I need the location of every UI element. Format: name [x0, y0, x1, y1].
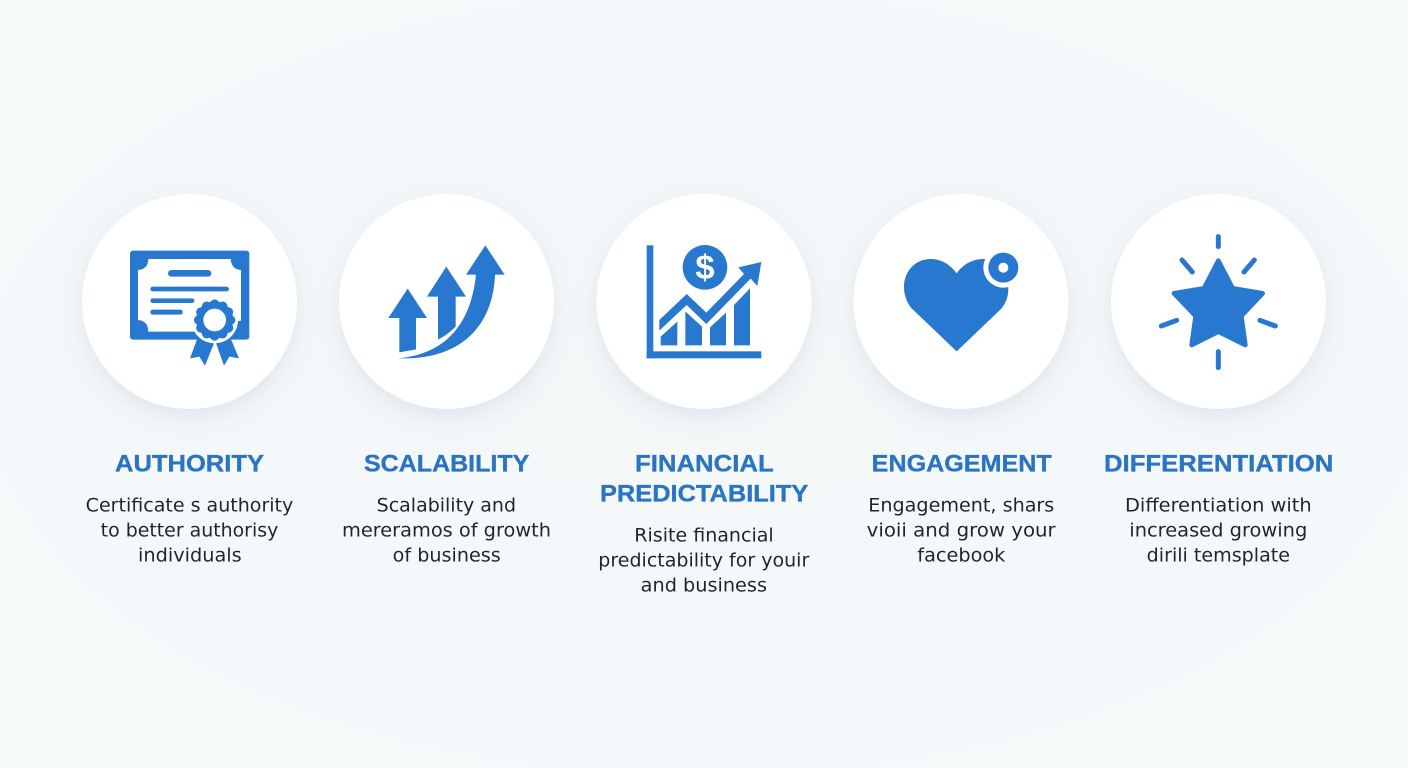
text block: financial predictability description: [598, 526, 810, 597]
icon: shining star: [1161, 237, 1275, 368]
icon: heart with notification badge: [904, 248, 1023, 351]
icon: rising arrows: [388, 245, 505, 358]
circle: scalability: [339, 194, 554, 409]
circle: authority: [82, 194, 297, 409]
heading: engagement: ENGAGEMENT: [872, 450, 1052, 478]
heading: differentiation: DIFFERENTIATION: [1104, 450, 1333, 478]
text block: scalability description: Scalability and: [377, 496, 516, 517]
icon: certificate with ribbon seal: [130, 251, 249, 366]
panel: financial predictability: [596, 194, 812, 597]
icon: growth chart with dollar coin: [647, 245, 761, 358]
text block: scalability description: mereramos of growth: [342, 521, 551, 542]
circle: engagement: [854, 194, 1068, 409]
text block: authority description: [86, 496, 293, 567]
text block: differentiation description: Differentiation with: [1125, 496, 1312, 517]
text block: engagement description: Engagement, shars: [868, 496, 1054, 517]
heading: authority: AUTHORITY: [115, 450, 264, 478]
text block: engagement description: [867, 496, 1056, 567]
heading: scalability: SCALABILITY: [364, 450, 529, 478]
text block: scalability description: of business: [393, 546, 501, 567]
text block: financial predictability description: and business: [641, 576, 767, 597]
panel: differentiation: [1104, 194, 1333, 567]
icon: growth chart with dollar coin: $: [695, 249, 715, 287]
heading: financial predictability: [600, 450, 808, 508]
heading: financial predictability: FINANCIAL: [635, 450, 774, 478]
text block: engagement description: vioii and grow your: [867, 521, 1056, 542]
text block: differentiation description: dirili temsplate: [1147, 546, 1290, 567]
circle: financial predictability: [596, 194, 812, 409]
text block: scalability description: [342, 496, 551, 567]
text block: financial predictability description: Risite financial: [634, 526, 774, 547]
text block: engagement description: facebook: [917, 546, 1005, 567]
panel: engagement: [854, 194, 1068, 567]
text block: authority description: Certificate s authority: [86, 496, 293, 517]
heading: financial predictability: PREDICTABILITY: [600, 480, 808, 508]
circle: differentiation: [1111, 194, 1326, 409]
text block: authority description: to better authorisy: [101, 521, 278, 542]
text block: differentiation description: [1125, 496, 1312, 567]
text block: financial predictability description: predictability for youir: [598, 551, 810, 572]
text block: differentiation description: increased growing: [1129, 521, 1307, 542]
panel: scalability: [339, 194, 554, 567]
panel: authority: [82, 194, 297, 567]
text block: authority description: individuals: [138, 546, 242, 567]
